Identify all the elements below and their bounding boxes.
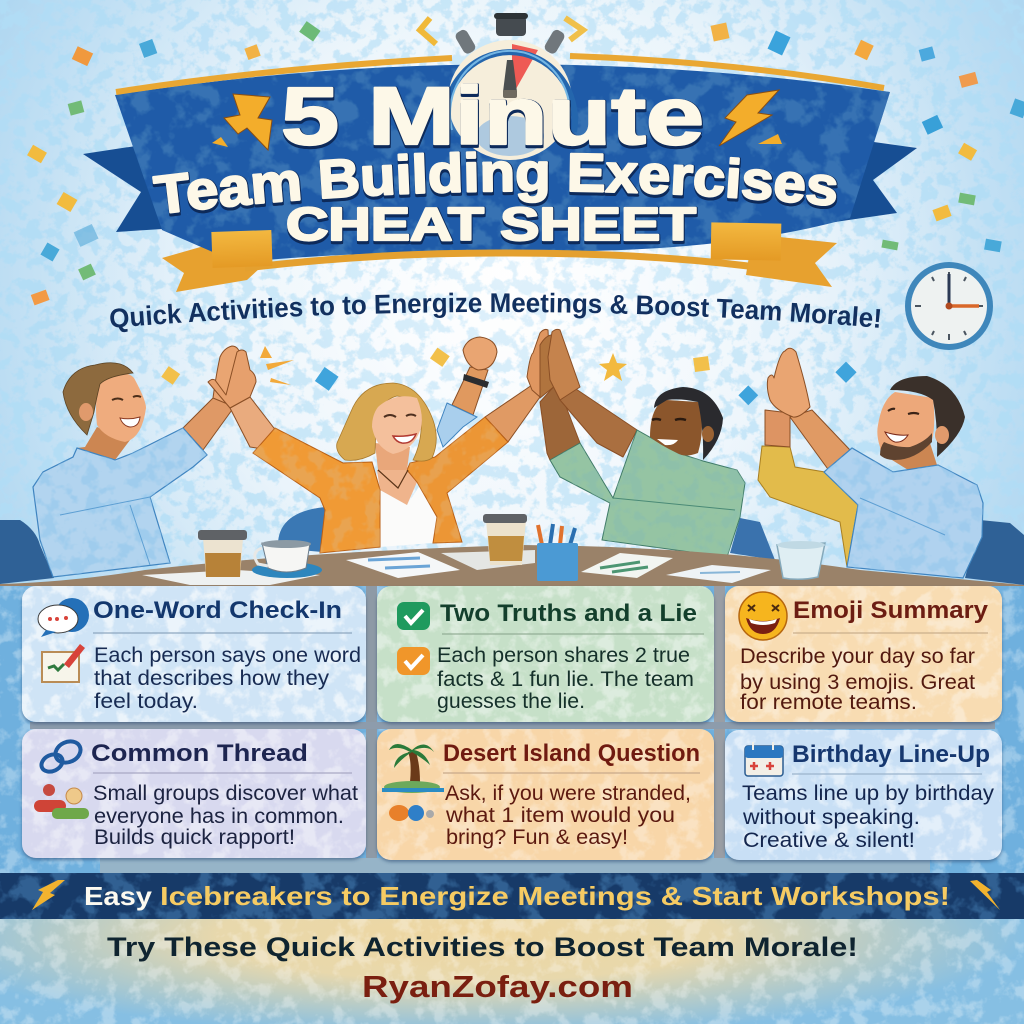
heading: Common Thread bbox=[91, 740, 308, 767]
bottom navy band bbox=[0, 873, 1024, 919]
heading: Two Truths and a Lie bbox=[440, 600, 697, 627]
body text bbox=[742, 782, 995, 852]
title banner bbox=[83, 56, 917, 292]
heading: Desert Island Question bbox=[443, 740, 700, 767]
neck bbox=[375, 443, 410, 470]
eyes bbox=[112, 396, 141, 400]
jacket bbox=[253, 417, 508, 553]
icon: calendar bbox=[745, 742, 783, 776]
saucer and mug bbox=[252, 540, 322, 578]
banner: main blue body bbox=[115, 64, 890, 263]
person 4: man in blue shirt with yellow sleeve bbox=[758, 348, 983, 578]
ear bbox=[702, 426, 714, 442]
subtitle: Quick Activities to to Energize Meetings & Boost Team Morale! bbox=[110, 292, 880, 332]
eyes bbox=[888, 409, 919, 414]
body text: Ask, if you were stranded, bbox=[445, 782, 691, 805]
panel: Common Thread bbox=[22, 729, 366, 858]
banner: gold bottom edge bbox=[245, 253, 748, 268]
front hand bbox=[548, 329, 580, 400]
body text: everyone has in common. bbox=[94, 805, 344, 828]
shirt bbox=[824, 448, 983, 578]
smile bbox=[885, 432, 908, 442]
body text: Creative & silent! bbox=[743, 829, 915, 852]
icon: lightning left bbox=[212, 94, 272, 150]
icon: lightning left bbox=[32, 880, 65, 910]
rear arm bbox=[540, 383, 580, 460]
hair bbox=[337, 383, 436, 461]
person 3: man in green shirt bbox=[540, 329, 745, 557]
body text: facts & 1 fun lie. The team bbox=[437, 668, 694, 691]
blue sleeve bbox=[437, 403, 477, 447]
title line: 5 Minute: 5 Minute bbox=[281, 71, 704, 162]
banner: gold square right bbox=[711, 222, 781, 261]
call to action: Try These Quick Activities to Boost Team Morale! bbox=[107, 932, 858, 962]
website url: RyanZofay.com bbox=[362, 969, 633, 1004]
person 2: woman in orange jacket bbox=[208, 329, 550, 553]
body text: for remote teams. bbox=[740, 691, 917, 714]
face bbox=[877, 392, 934, 460]
hands bbox=[767, 348, 810, 417]
band text: highlight: Icebreakers to Energize Meetings & Start Workshops! bbox=[160, 881, 950, 911]
face bbox=[372, 396, 422, 454]
body text: Small groups discover what bbox=[93, 782, 358, 805]
shirt bbox=[33, 428, 207, 577]
body text: by using 3 emojis. Great bbox=[740, 671, 975, 694]
banner: right gold ribbon bbox=[746, 236, 837, 287]
banner: gold square left bbox=[211, 230, 273, 268]
icon: group figures bbox=[34, 784, 89, 819]
beard bbox=[880, 433, 932, 460]
band text: Easy: Easy bbox=[84, 881, 153, 911]
blue notes bbox=[666, 565, 771, 583]
shirt bbox=[550, 430, 745, 557]
icon: stopwatch bbox=[445, 13, 575, 160]
fist bbox=[463, 337, 497, 370]
chairs bbox=[0, 507, 1024, 585]
eyes bbox=[652, 419, 686, 420]
rear arm bbox=[765, 410, 790, 447]
banner: left swallowtail bbox=[83, 142, 178, 232]
banner: right swallowtail bbox=[835, 138, 917, 222]
body text bbox=[93, 782, 358, 849]
title text bbox=[152, 71, 838, 250]
body text bbox=[740, 645, 975, 714]
card section background bbox=[0, 586, 1024, 874]
panel: Two Truths and a Lie bbox=[377, 586, 714, 722]
hair bbox=[654, 387, 723, 460]
hair bbox=[890, 376, 965, 457]
coffee cup left bbox=[198, 530, 247, 577]
smile bbox=[393, 434, 416, 443]
body text bbox=[445, 782, 691, 849]
body text: Describe your day so far bbox=[740, 645, 975, 668]
icon: chain link bbox=[39, 737, 84, 775]
title line: CHEAT SHEET: CHEAT SHEET bbox=[286, 198, 696, 250]
body text: feel today. bbox=[94, 690, 198, 713]
necklace bbox=[378, 470, 408, 488]
watch bbox=[463, 374, 489, 388]
banner: left gold ribbon bbox=[162, 240, 260, 292]
icon: lightning right bbox=[719, 90, 782, 146]
panel: One-Word Check-In bbox=[22, 586, 366, 722]
pen holder bbox=[537, 524, 578, 581]
icon: speech bubbles bbox=[38, 598, 89, 637]
body text: Builds quick rapport! bbox=[94, 826, 295, 849]
front arm bbox=[560, 387, 637, 457]
right forearm bbox=[485, 385, 540, 442]
body text: Each person says one word bbox=[94, 644, 361, 667]
body text: Teams line up by birthday bbox=[742, 782, 995, 805]
person 1: man in blue shirt bbox=[33, 346, 241, 577]
heading: Birthday Line-Up bbox=[792, 741, 990, 768]
icon: green check bbox=[397, 602, 430, 630]
left hand bbox=[208, 350, 256, 408]
body text: what 1 item would you bbox=[445, 804, 675, 827]
banner: gold top edge bbox=[116, 56, 884, 92]
icon: orange check bbox=[397, 647, 430, 675]
white top bbox=[380, 485, 437, 547]
title line: Team Building Exercises: Team Building Exercises bbox=[152, 151, 838, 216]
face bbox=[96, 373, 146, 442]
raised forearm bbox=[452, 367, 488, 415]
rear hand bbox=[540, 335, 556, 398]
panel: Emoji Summary bbox=[725, 586, 1002, 722]
icon: note with pencil bbox=[42, 644, 85, 682]
water glass bbox=[777, 541, 825, 579]
body text bbox=[437, 644, 694, 713]
body text bbox=[94, 644, 361, 713]
body text: guesses the lie. bbox=[437, 690, 585, 713]
front arm bbox=[790, 410, 850, 472]
icon: lightning right bbox=[970, 880, 1000, 910]
paper middle bbox=[346, 552, 460, 578]
body text: without speaking. bbox=[742, 806, 920, 829]
neck bbox=[77, 427, 130, 460]
paper left bbox=[142, 570, 320, 585]
green notes bbox=[581, 553, 673, 578]
icon: laughing emoji bbox=[739, 592, 787, 640]
body text: bring? Fun & easy! bbox=[446, 826, 628, 849]
yellow sleeve bbox=[758, 446, 858, 567]
eyes bbox=[384, 414, 416, 417]
panel: Birthday Line-Up bbox=[725, 730, 1002, 860]
body text: Each person shares 2 true bbox=[437, 644, 690, 667]
hand bbox=[213, 346, 241, 405]
icon: pebbles bbox=[389, 805, 434, 821]
neck bbox=[892, 443, 937, 473]
meeting table bbox=[0, 545, 1024, 590]
icon: palm island bbox=[382, 744, 444, 793]
heading: Emoji Summary bbox=[793, 597, 989, 624]
confetti bbox=[27, 18, 1024, 405]
forearm bbox=[183, 398, 237, 450]
smile bbox=[120, 417, 140, 427]
heading: One-Word Check-In bbox=[93, 597, 342, 624]
hair bbox=[63, 363, 133, 435]
body text: that describes how they bbox=[94, 667, 330, 690]
coffee cup right bbox=[483, 514, 527, 565]
icon: wall clock bbox=[905, 262, 993, 350]
right hand bbox=[527, 329, 550, 397]
panel: Desert Island Question bbox=[377, 729, 714, 860]
ear bbox=[935, 426, 949, 444]
footer background bbox=[0, 916, 1024, 1024]
notebook bbox=[441, 550, 535, 570]
head bbox=[650, 400, 702, 456]
left forearm bbox=[230, 397, 277, 450]
chest skin bbox=[377, 470, 417, 505]
ear bbox=[79, 403, 93, 421]
smile bbox=[657, 439, 678, 445]
